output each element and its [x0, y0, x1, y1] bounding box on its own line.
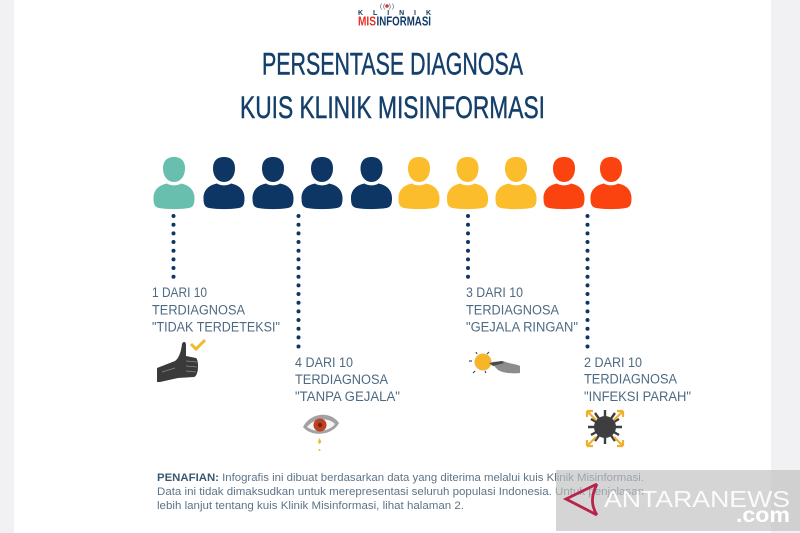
label: 1 dari 10 tidak terdeteksi: 1 DARI 10 — [152, 285, 207, 300]
dotted connector: gejala ringan — [466, 214, 470, 279]
icon: thumbs up with check mark — [157, 340, 205, 382]
label: 4 dari 10 tanpa gejala — [295, 355, 400, 404]
disclaimer text: Data ini tidak dimaksudkan untuk merepresentasi seluruh populasi Indonesia. Untuk penjelasan — [157, 486, 644, 498]
watermark: Antaranews.com — [556, 470, 800, 531]
title: KUIS KLINIK MISINFORMASI — [240, 89, 545, 125]
label: 4 dari 10 tanpa gejala: TERDIAGNOSA — [295, 372, 388, 387]
label: 4 dari 10 tanpa gejala: "TANPA GEJALA" — [295, 389, 400, 404]
label: 2 dari 10 infeksi parah: 2 DARI 10 — [584, 355, 642, 370]
dotted connector: infeksi parah — [586, 214, 590, 348]
label: 1 dari 10 tidak terdeteksi — [152, 285, 280, 334]
label: 1 dari 10 tidak terdeteksi: TERDIAGNOSA — [152, 302, 245, 318]
row of ten person icons — [154, 157, 632, 209]
disclaimer text: PENAFIAN: Infografis ini dibuat berdasarkan data yang diterima melalui kuis Klinik Misinformasi. — [157, 472, 644, 484]
label: 2 dari 10 infeksi parah — [584, 355, 691, 404]
label: 1 dari 10 tidak terdeteksi: "TIDAK TERDETEKSI" — [152, 320, 280, 334]
logo: Klinik Misinformasi — [358, 4, 431, 28]
label: 2 dari 10 infeksi parah: "INFEKSI PARAH" — [584, 389, 691, 404]
logo: Klinik Misinformasi: INFORMASI — [376, 14, 431, 28]
label: 3 dari 10 gejala ringan: 3 DARI 10 — [466, 285, 523, 300]
title: PERSENTASE DIAGNOSA — [262, 46, 523, 82]
label: 4 dari 10 tanpa gejala: 4 DARI 10 — [295, 355, 353, 370]
icon: hand pointing at yellow sun — [469, 352, 520, 373]
dotted connector: tidak terdeteksi — [172, 214, 176, 279]
label: 3 dari 10 gejala ringan — [466, 285, 578, 334]
icon: virus with yellow arrows — [587, 410, 623, 446]
label: 2 dari 10 infeksi parah: TERDIAGNOSA — [584, 372, 677, 386]
logo: Klinik Misinformasi: (( )) — [380, 4, 394, 10]
watermark: Antaranews.com: .com — [736, 504, 790, 527]
label: 3 dari 10 gejala ringan: "GEJALA RINGAN" — [466, 320, 578, 334]
disclaimer text: lebih lanjut tentang kuis Klinik Misinformasi, lihat halaman 2. — [157, 500, 464, 512]
dotted connector: tanpa gejala — [296, 214, 300, 348]
watermark: Antaranews.com: ANTARANEWS — [604, 486, 790, 512]
label: 3 dari 10 gejala ringan: TERDIAGNOSA — [466, 302, 559, 318]
icon: eye with red iris and drops — [303, 415, 339, 451]
title — [240, 46, 545, 125]
disclaimer text — [157, 472, 644, 512]
logo: Klinik Misinformasi: MIS — [358, 14, 376, 28]
logo: Klinik Misinformasi: KLINIK — [358, 10, 431, 17]
